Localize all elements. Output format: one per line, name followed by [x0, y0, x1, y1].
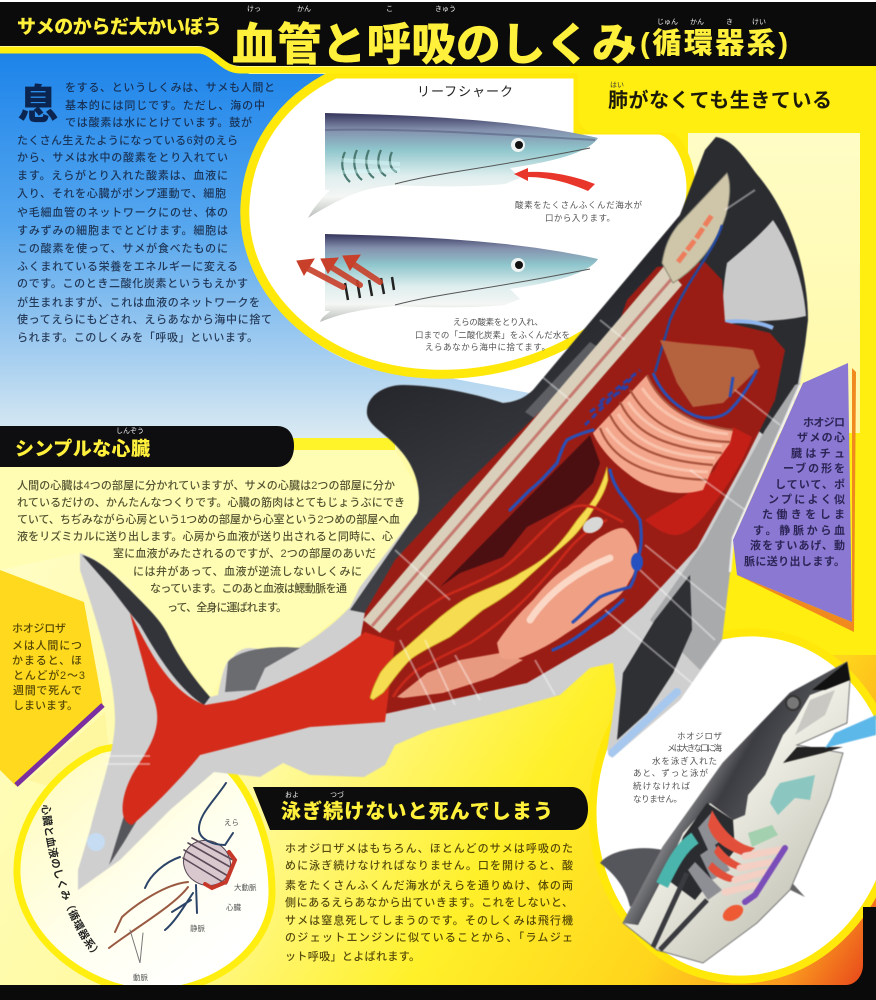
caption: water leaves: 口までの「二酸化炭素」をふくんだ水を [415, 330, 570, 340]
arteries brown [109, 882, 188, 948]
bright red caudal muscle [123, 613, 395, 825]
text block: breathing: のです。このとき二酸化炭素というもえかす [17, 276, 248, 290]
note: tube-shaped heart: ザメの心 [797, 430, 845, 444]
caption: water leaves: えらあなから海中に捨てます。 [425, 342, 550, 352]
bright red gill bed [645, 427, 752, 535]
drop cap: 息 [18, 83, 58, 127]
label: reef shark: リーフシャーク [417, 84, 513, 99]
text block: swimming: 素をたくさんふくんだ海水がえらを通りぬけ、体の両 [285, 878, 573, 892]
diagram labels: 動脈 [133, 972, 148, 982]
thin gill lines [130, 930, 143, 963]
brain case [662, 173, 730, 283]
yellow outline ring [245, 74, 691, 374]
note: tube-shaped heart [733, 363, 856, 632]
note: tube-shaped heart: 脈に送り出します。 [744, 554, 845, 568]
series title: サメのからだ大かいぼう [17, 16, 222, 38]
grey back highlight [525, 342, 606, 425]
diagram labels [133, 818, 257, 982]
heading pill: simple heart [0, 426, 294, 467]
caption: must swim after mouth: なりません。 [633, 794, 682, 804]
furigana row: き [726, 18, 733, 26]
text block: breathing: ます。えらがとり入れた酸素は、血液に [17, 168, 228, 182]
illustration: great white shark with gills [600, 662, 876, 963]
diagram labels: 大動脈 [234, 882, 257, 892]
note: tube-shaped heart: ホオジロ [803, 416, 845, 429]
nose dark [812, 662, 850, 690]
text block: swimming: ット呼吸」とよばれます。 [285, 950, 420, 963]
pink and purple gill fans [725, 848, 785, 902]
text block: heart: 人間の心臓は4つの部屋に分かれていますが、サメの心臓は2つの部屋に分か [17, 478, 395, 492]
diagram labels: 静脈 [190, 923, 205, 933]
main title: 血管と呼吸のしくみ [232, 19, 637, 70]
text block: breathing: 入り、それを心臓がポンプ運動で、細胞 [17, 186, 226, 200]
note: tube-shaped heart: ーブの形を [783, 461, 845, 475]
text block: breathing: すみずみの細胞までとどけます。細胞は [17, 223, 228, 237]
note: two to three weeks: かまると、ほ [12, 654, 82, 667]
panel: pale heart text area [0, 450, 425, 697]
blue water jet [825, 715, 876, 748]
dark and white lower tubes [653, 873, 707, 950]
intestine [397, 653, 523, 698]
gills: salmon arches [593, 375, 733, 493]
text block: breathing: 基本的には同じです。ただし、海の中 [65, 98, 265, 112]
caption: water enters [515, 200, 642, 223]
panel: lower right white diagram [570, 613, 876, 999]
icon: three red water arrows [297, 255, 380, 287]
note: tube-shaped heart: ンプによく似 [768, 493, 845, 506]
caption: must swim after mouth: あと、ずっと泳が [633, 768, 708, 778]
text block: breathing: や毛細血管のネットワークにのせ、体の [17, 205, 228, 219]
dark back [623, 662, 850, 925]
text block: heart: 室に血液がみたされるのですが、2つの部屋のあいだ [113, 546, 376, 560]
pale oval organ [580, 513, 606, 537]
dark head [650, 137, 808, 440]
red arteries [393, 506, 623, 697]
note: tube-shaped heart: す。静脈から血 [753, 523, 845, 537]
note: two to three weeks: とんどが2〜3 [13, 668, 85, 682]
pale strip under purple line [28, 712, 110, 790]
text block: breathing: では酸素は水にとけています。鼓が [65, 115, 252, 129]
blue striped spine vessels [585, 370, 640, 425]
heading pill: simple heart: しんぞう [116, 427, 144, 435]
note: tube-shaped heart: た働きをしま [762, 507, 845, 521]
body cavity dark red [360, 262, 785, 715]
furigana row: けい [752, 18, 766, 26]
light body and jaw [623, 662, 850, 963]
diagram labels: えら [224, 818, 239, 827]
rear fin [780, 875, 805, 897]
heart tube behind gills [660, 340, 760, 407]
background: lower yellow gradient [0, 400, 876, 1000]
black title band [0, 2, 876, 66]
upper jaw shading [795, 690, 835, 735]
panel: left yellow note [0, 570, 103, 786]
furigana row: こ [386, 5, 393, 13]
red chamber [720, 901, 746, 925]
teal pharynx [662, 838, 695, 885]
liver [370, 467, 608, 700]
purple panel [733, 363, 852, 622]
blue veins over gills [653, 370, 757, 418]
note: tube-shaped heart: 液をすいあげ、動 [750, 538, 845, 552]
stomach highlight [530, 558, 610, 620]
dark maroon muscle [440, 435, 600, 587]
text block: breathing: が生まれますが、これは血液のネットワークを [17, 295, 260, 309]
note: two to three weeks: しまいます。 [13, 699, 78, 712]
furigana row [247, 5, 766, 26]
illustration: cutaway great white shark model [78, 137, 808, 890]
yellow strip beside heart heading [290, 438, 395, 450]
red gills [708, 810, 755, 882]
stomach [497, 528, 637, 659]
text block: heart: 液をリズミカルに送り出します。心房から血液が送り出されると同時に、心 [17, 529, 393, 543]
note: tube-shaped heart: 臓はチュ [791, 446, 845, 460]
text block: heart: なっています。このあと血液は鰓動脈を通 [150, 581, 347, 595]
text block: heart: って、全身に運ばれます。 [167, 600, 287, 614]
background: upper right pale panel [688, 133, 860, 433]
caption: water leaves: えらの酸素をとり入れ、 [453, 317, 543, 327]
mouth [783, 747, 843, 763]
text block: breathing: から、サメは水中の酸素をとり入れてい [17, 150, 228, 164]
grey blocks [688, 812, 730, 900]
text block: swimming: ホオジロザメはもちろん、ほとんどのサメは呼吸のた [285, 842, 573, 855]
lower pectoral fin [612, 575, 692, 753]
vertical caption: diagram title: 心臓と血液のしくみ（循環器系） [42, 804, 98, 952]
blue atrium [631, 553, 643, 571]
text block: swimming: のジェットエンジンに似ていることから、「ラムジェ [285, 931, 573, 944]
text block: heart [17, 478, 405, 614]
heading: alive without lungs: 肺がなくても生きている [608, 88, 832, 112]
reef shark: water in [308, 113, 598, 218]
lower blue vein [553, 470, 641, 650]
text block: heart: れているだけの、かんたんなつくりです。心臓の筋肉はとてもじょうぶにでき [17, 495, 405, 509]
text block: swimming: 側にあるえらあなから出ていきます。これをしないと、 [285, 896, 573, 909]
text block: breathing: をする、というしくみは、サメも人間と [65, 81, 275, 94]
note: two to three weeks: ホオジロザ [12, 622, 66, 635]
text block: swimming [285, 842, 573, 963]
reef shark: water out [297, 234, 598, 322]
subtitle: (循環器系) [640, 27, 788, 60]
background: right yellow column [570, 55, 876, 655]
dorsal fin and back [350, 137, 740, 620]
panel: white breathing diagram [245, 74, 691, 374]
caption: must swim after mouth: 水を泳ぎ入れた [652, 756, 717, 766]
icon: red water arrow [514, 168, 595, 191]
blue back vein [510, 430, 593, 510]
caption: water enters: 口から入ります。 [545, 213, 615, 223]
side rim [650, 383, 800, 670]
furigana row: じゅん [657, 18, 678, 26]
clear plastic stand clips [105, 190, 780, 764]
blue glow on fin [725, 321, 773, 328]
text block: swimming: サメは窒息死してしまうのです。そのしくみは飛行機 [285, 913, 573, 927]
secondary fin shadow [225, 647, 300, 692]
upper grey fin [723, 220, 806, 321]
gill coil [175, 832, 239, 894]
rim highlight [730, 385, 800, 572]
panel: lung heading block [578, 66, 860, 133]
spine [363, 265, 682, 633]
note: two to three weeks: メは人間につ [12, 639, 82, 652]
caption: must swim after mouth [633, 731, 722, 804]
caption: must swim after mouth: ホオジロザ [677, 731, 722, 741]
shark silhouette shell [78, 137, 808, 890]
purple panel shadow [737, 368, 856, 632]
yellow trim under band [0, 50, 600, 70]
caption: must swim after mouth: メは大きな口に海 [667, 743, 722, 753]
text block: breathing: この酸素を使って、サメが食べたものに [17, 241, 228, 255]
heading pill: keep swimming: およ [285, 791, 299, 799]
purple diagonal line [16, 705, 103, 785]
diagram labels: 心臓 [226, 902, 241, 912]
heading pill: simple heart: シンプルな心臓 [15, 437, 150, 460]
upper blue vein [655, 225, 722, 372]
veins dark blue [145, 783, 233, 930]
note: two to three weeks [12, 622, 85, 712]
caption: water enters: 酸素をたくさんふくんだ海水が [515, 200, 642, 210]
furigana: はい [610, 81, 624, 89]
tail dark inner [82, 555, 210, 865]
text block: breathing: 使ってえらにもどされ、えらあなから海中に捨て [17, 312, 272, 326]
water arrows [748, 775, 815, 847]
furigana row: かん [297, 5, 311, 13]
note: tube-shaped heart: していて、ポ [775, 478, 845, 491]
text block: breathing [17, 81, 275, 344]
bottom black band [0, 907, 876, 1000]
text block: heart: ていて、ちぢみながら心房という1つめの部屋から心室という2つめの部屋へ血 [17, 512, 400, 526]
heading pill: keep swimming: つづ [330, 790, 344, 799]
furigana row: かん [690, 18, 704, 26]
text block: heart: には弁があって、血液が逆流しないしくみに [133, 564, 362, 578]
text block: breathing: ふくまれている栄養をエネルギーに変える [17, 259, 238, 273]
dorsal fin [600, 848, 663, 907]
furigana row: きゅう [435, 5, 456, 13]
caption: water leaves [415, 317, 570, 352]
caption path [42, 805, 100, 963]
header bar [0, 2, 876, 70]
text block: swimming: めに泳ぎ続けなければなりません。口を開けると、酸 [285, 858, 573, 872]
eye [786, 696, 800, 710]
heading pill: keep swimming: 泳ぎ続けないと死んでしまう [281, 799, 553, 823]
caption: must swim after mouth: 続けなければ [633, 781, 690, 791]
gill slit cut [668, 803, 735, 900]
panel: lower left white circle [17, 746, 272, 992]
furigana row: けっ [247, 5, 261, 13]
panel: blue breathing section [0, 52, 540, 445]
text block: breathing: られます。このしくみを「呼吸」といいます。 [17, 331, 258, 344]
heading pill: keep swimming [253, 787, 588, 830]
diagram: circulation lines [109, 783, 239, 963]
text block: breathing: たくさん生えたようになっている6対のえら [17, 133, 238, 147]
note: two to three weeks: 週間で死んで [13, 684, 82, 697]
